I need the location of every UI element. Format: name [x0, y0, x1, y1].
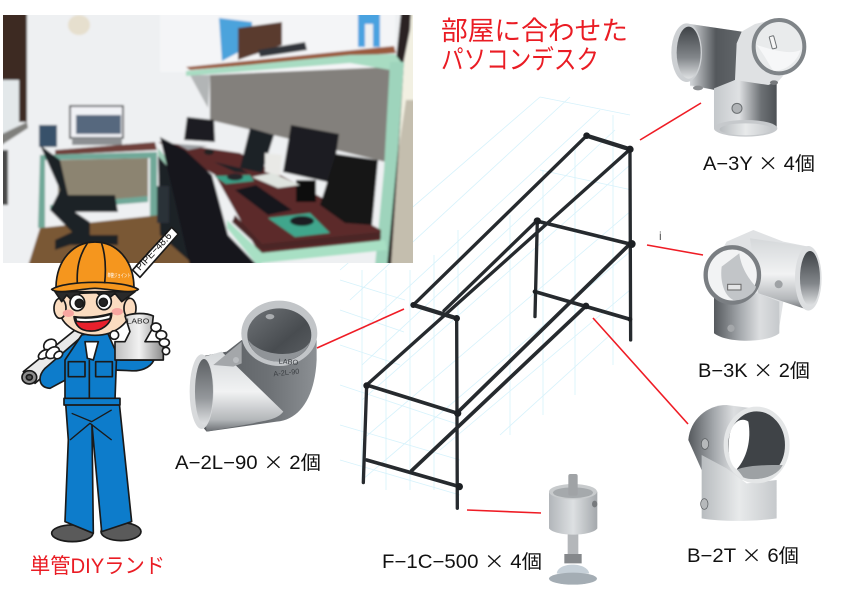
vertical legs [363, 149, 631, 508]
photo laptop one [184, 117, 215, 142]
photo desk front pipe [227, 220, 387, 266]
photo concrete wall [210, 67, 390, 162]
pipe on shoulder [22, 227, 178, 384]
title second line: パソコンデスク [441, 45, 599, 75]
head [59, 279, 131, 335]
photo shelf [186, 46, 396, 70]
pipe on shoulder: PIPE−48.6 [134, 231, 175, 273]
photo wall [0, 12, 416, 266]
fitting B-2T [688, 405, 787, 521]
photo tower pc [320, 154, 378, 225]
character: DIY worker in helmet: 単管ジョイント [107, 271, 131, 279]
character: DIY worker in helmet: LABO [127, 318, 150, 325]
gloves [37, 323, 170, 361]
character: DIY worker in helmet [22, 227, 178, 542]
label B-2T: B−2T × 6個 [687, 541, 799, 568]
small letter mark: i [659, 229, 662, 243]
cross bars and long rails [367, 221, 630, 487]
fitting F-1C adjuster foot [549, 474, 597, 585]
photo floor [28, 215, 195, 266]
fitting A-3Y [671, 18, 805, 137]
wireframe desk drawing [363, 132, 636, 508]
held fitting [115, 313, 163, 360]
torso [65, 331, 117, 400]
photo chair two [160, 137, 258, 266]
brand caption: 単管DIYランド [30, 555, 165, 578]
shoes [52, 525, 93, 542]
title: 部屋に合わせた [441, 16, 628, 46]
photo chair one [40, 145, 118, 250]
fitting B-3K [706, 230, 822, 341]
joints [363, 132, 636, 490]
label F-1C-500: F−1C−500 × 4個 [382, 547, 542, 574]
mouth [74, 313, 112, 331]
eyes [70, 295, 85, 311]
photo dark door edge [383, 12, 411, 266]
label A-3Y: A−3Y × 4個 [703, 149, 815, 176]
photo phone [265, 153, 282, 176]
helmet [56, 242, 134, 287]
top shelf rails [367, 136, 630, 385]
photo second desk top [158, 142, 381, 255]
fitting A-2L-90: A-2L-90 [273, 367, 300, 378]
photo lamp [68, 15, 90, 35]
photo right wall [400, 15, 413, 135]
photo monitor [283, 125, 339, 183]
label B-3K: B−3K × 2個 [698, 356, 810, 383]
isometric blue grid behind the desk frame [340, 97, 632, 495]
photo left desk [55, 142, 157, 155]
fitting A-2L-90: LABO [278, 357, 299, 367]
photo pc under desk [157, 186, 169, 223]
legs [65, 403, 132, 533]
photo books on shelf [219, 18, 252, 61]
arms [40, 337, 82, 388]
hair [55, 292, 135, 302]
photo: room with pipe desks [0, 12, 416, 266]
photo keyboard [235, 185, 292, 215]
photo mats [214, 175, 254, 184]
red leader lines [317, 103, 703, 513]
photo left monitor [70, 106, 123, 138]
fitting A-2L-90 [190, 301, 317, 432]
photo laptop two [240, 128, 274, 173]
photo window [0, 12, 27, 122]
label A-2L-90: A−2L−90 × 2個 [175, 448, 321, 475]
